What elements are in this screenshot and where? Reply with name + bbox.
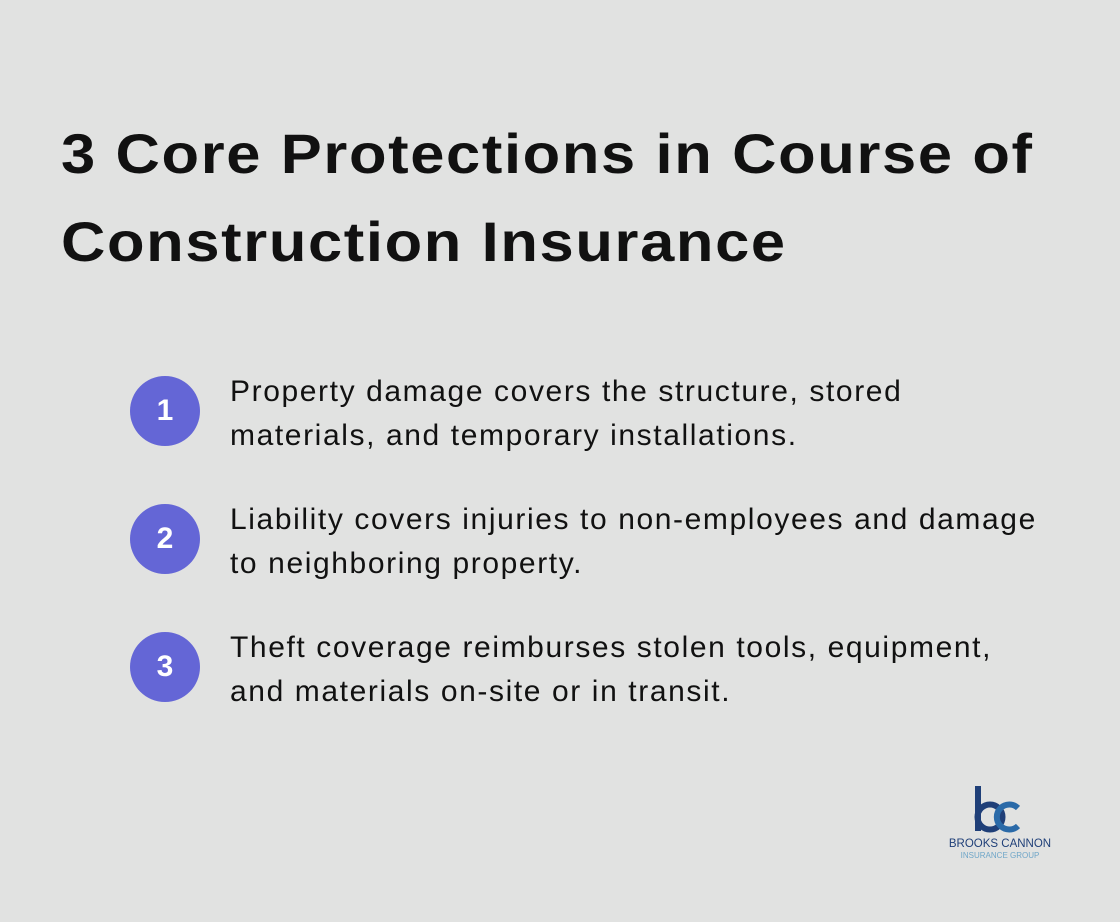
title (61, 122, 1034, 273)
text 1: Property damage covers the structure, stored (230, 375, 902, 408)
number badge 2: 2 (157, 522, 173, 555)
item 3 (130, 631, 992, 708)
text 1 (230, 375, 902, 452)
item 1 (130, 375, 902, 452)
text 1: materials, and temporary installations. (230, 419, 798, 452)
text 3 (230, 631, 992, 708)
number badge 1 (130, 376, 200, 446)
logo: INSURANCE GROUP (961, 851, 1039, 860)
number badge 3 (130, 632, 200, 702)
text 2: to neighboring property. (230, 547, 583, 580)
number badge 2 (130, 504, 200, 574)
title: 3 Core Protections in Course of (61, 122, 1034, 185)
text 3: and materials on-site or in transit. (230, 675, 731, 708)
item 2 (130, 503, 1037, 580)
text 3: Theft coverage reimburses stolen tools, equipment, (230, 631, 992, 664)
text 2 (230, 503, 1037, 580)
logo: BROOKS CANNON (949, 838, 1051, 850)
text 2: Liability covers injuries to non-employees and damage (230, 503, 1037, 536)
number badge 1: 1 (157, 394, 173, 427)
title: Construction Insurance (61, 210, 787, 273)
logo (949, 786, 1051, 860)
number badge 3: 3 (157, 650, 173, 683)
